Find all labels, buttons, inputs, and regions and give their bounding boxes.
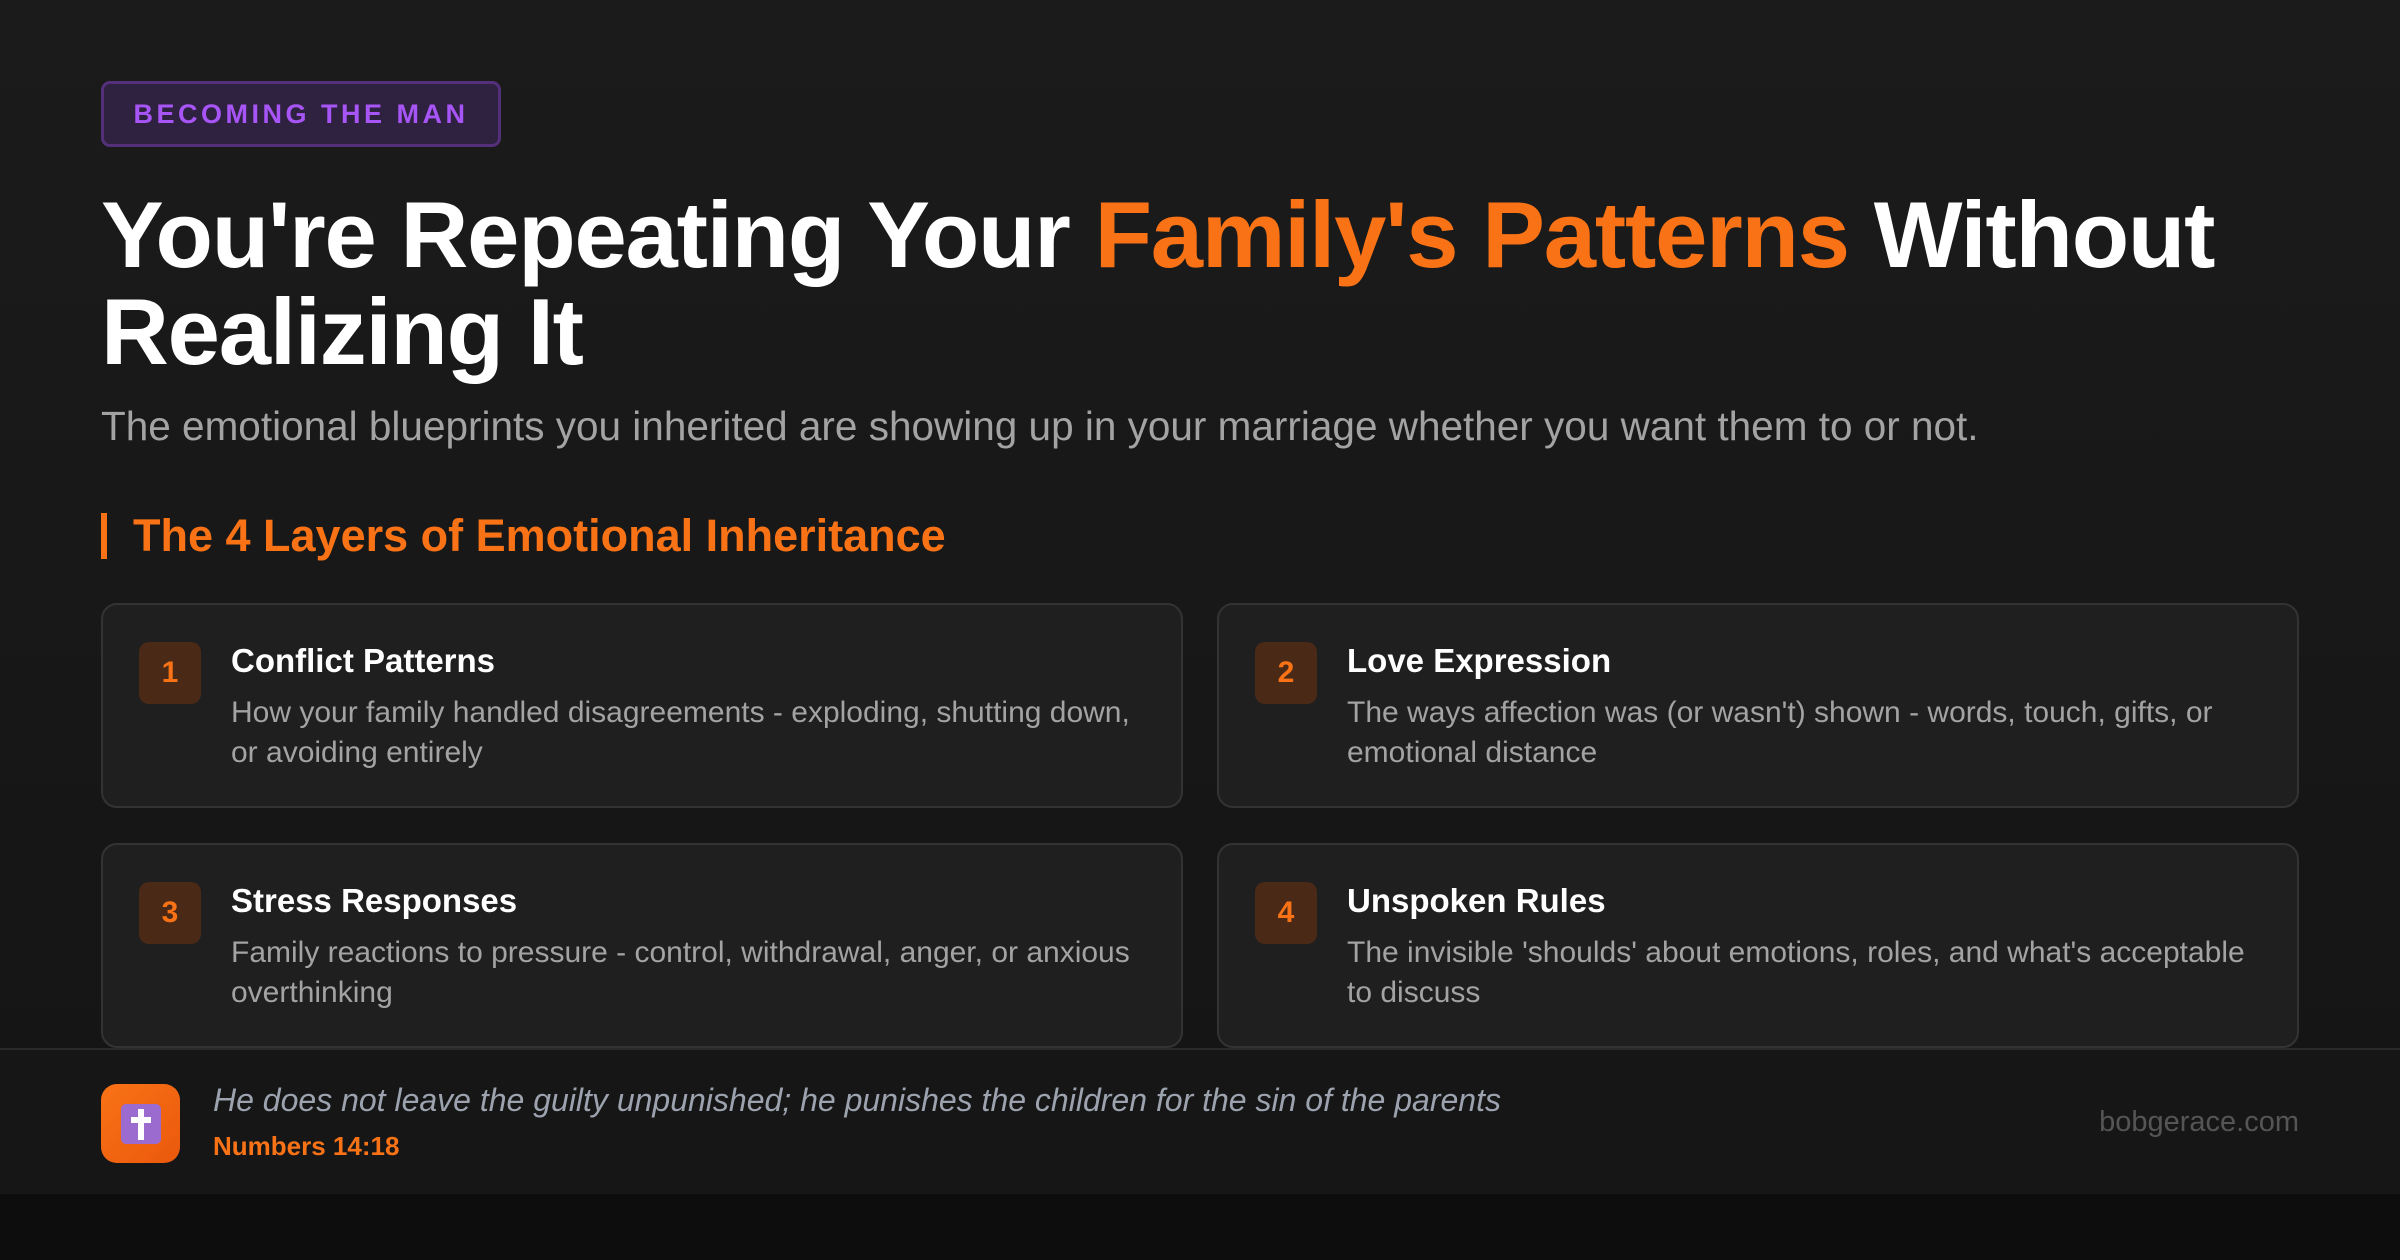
reference: Numbers 14:18 xyxy=(213,1131,399,1161)
number 1: 1 xyxy=(162,656,178,689)
number 2 xyxy=(1255,642,1317,704)
subtitle: The emotional blueprints you inherited are showing up in your marriage whether you want them to or not. xyxy=(101,403,1979,449)
number 4 xyxy=(1255,882,1317,944)
number 3 xyxy=(139,882,201,944)
number 2: 2 xyxy=(1278,656,1294,689)
footer xyxy=(0,1048,2400,1194)
card 2 xyxy=(1217,603,2299,808)
card text: The ways affection was (or wasn't) shown - words, touch, gifts, or emotional distance xyxy=(1347,696,2213,769)
badge xyxy=(101,81,501,147)
card title: Conflict Patterns xyxy=(231,642,495,679)
title: You're Repeating Your Family's Patterns Without Realizing It xyxy=(101,182,2214,384)
card title: Unspoken Rules xyxy=(1347,882,1606,919)
card title: Stress Responses xyxy=(231,882,517,919)
card 1 xyxy=(101,603,1183,808)
card text: How your family handled disagreements - exploding, shutting down, or avoiding entirely xyxy=(231,696,1130,769)
card title: Love Expression xyxy=(1347,642,1611,679)
card 4 xyxy=(1217,843,2299,1048)
card text: The invisible 'shoulds' about emotions, roles, and what's acceptable to discuss xyxy=(1347,936,2245,1009)
number 4: 4 xyxy=(1278,896,1294,929)
card text: Family reactions to pressure - control, withdrawal, anger, or anxious overthinking xyxy=(231,936,1130,1009)
site url: bobgerace.com xyxy=(2099,1106,2299,1138)
number 3: 3 xyxy=(162,896,178,929)
card 3 xyxy=(101,843,1183,1048)
icon: cross xyxy=(101,1084,180,1163)
quote: He does not leave the guilty unpunished; he punishes the children for the sin of the parents xyxy=(213,1082,1501,1118)
badge: BECOMING THE MAN xyxy=(134,98,468,128)
number 1 xyxy=(139,642,201,704)
section heading: The 4 Layers of Emotional Inheritance xyxy=(133,510,946,561)
